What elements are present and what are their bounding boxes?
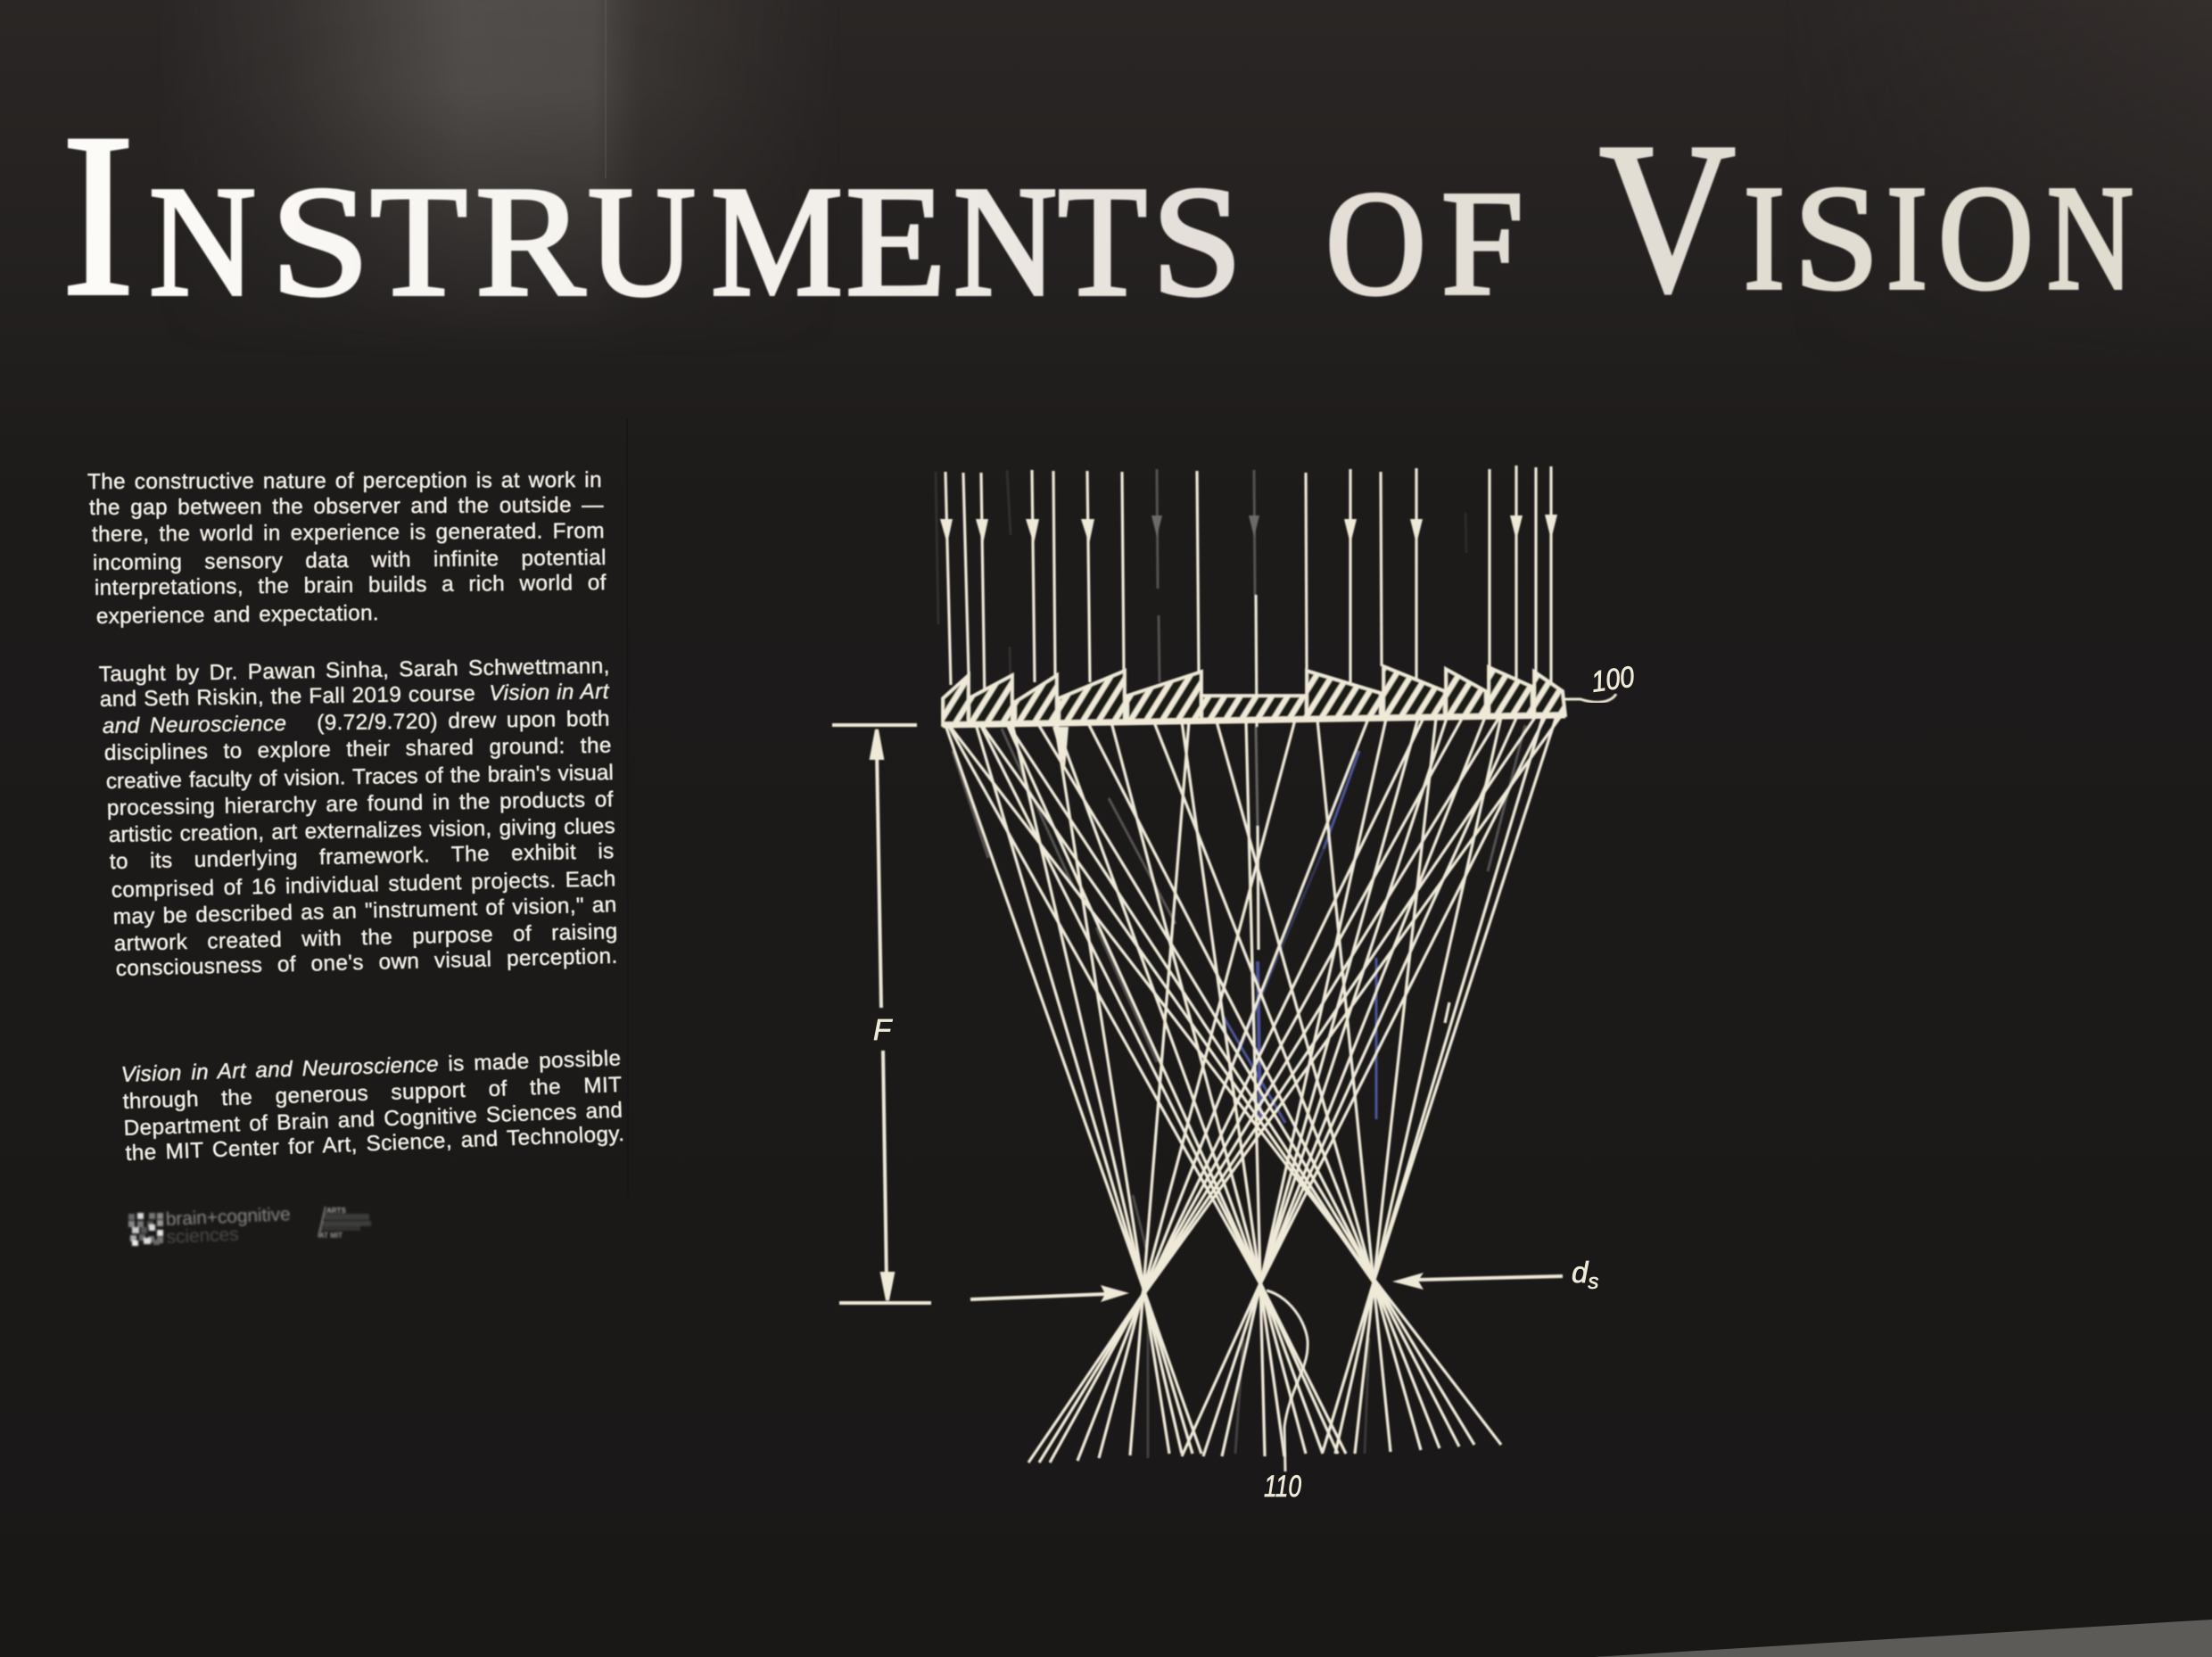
text panel: artwork created with the purpose of raising [113, 919, 618, 955]
logo wordmark [165, 1204, 292, 1248]
text panel: through the generous support of the MIT [122, 1072, 623, 1113]
refracted rays: focus centre [948, 716, 1546, 1456]
title: N [2047, 155, 2134, 321]
text panel: comprised of 16 individual student projects. Each [111, 867, 616, 902]
leader line: 110 [1267, 1290, 1308, 1472]
text panel: experience and expectation. [96, 601, 379, 628]
title: S [1794, 155, 1879, 321]
lens baseline [943, 715, 1565, 725]
text panel: and Neuroscience (9.72/9.720) drew upon both [103, 706, 610, 738]
title [62, 86, 2134, 344]
paragraph: acknowledgement [120, 1046, 625, 1165]
title: E [846, 154, 946, 329]
text panel: incoming sensory data with infinite potential [93, 545, 607, 574]
arrowheads [940, 515, 1557, 544]
arrow: right pointer to focus [1392, 1273, 1563, 1290]
text panel: disciplines to explore their shared ground: the [104, 733, 612, 764]
label: 100: 100 [1589, 660, 1637, 698]
logo: arts at MIT: ARTS [326, 1207, 346, 1215]
logo: arts at MIT: AT MIT [319, 1232, 343, 1240]
text panel: interpretations, the brain builds a rich world of [95, 570, 607, 599]
icon: dot grid [128, 1213, 163, 1246]
text panel: Vision in Art and Neuroscience is made possible [120, 1046, 622, 1086]
prism facets [943, 666, 1565, 725]
refracted rays: focus left [945, 716, 1561, 1463]
text panel: the gap between the observer and the outside — [89, 492, 604, 519]
text panel: artistic creation, art externalizes vision, giving clues [109, 814, 615, 846]
title: V [1599, 99, 1736, 337]
title: U [588, 154, 696, 329]
title: T [370, 154, 467, 329]
title: T [1058, 154, 1147, 329]
dimension: focal length F [832, 725, 931, 1303]
text panel: Taught by Dr. Pawan Sinha, Sarah Schwettmann, [99, 654, 610, 686]
title: I [1886, 155, 1927, 321]
label: 110: 110 [1264, 1470, 1301, 1504]
leader line: 100 [1563, 694, 1616, 702]
logo wordmark: sciences [166, 1224, 239, 1248]
text panel: consciousness of one's own visual perception. [115, 944, 618, 980]
text panel: may be described as an "instrument of vision," an [112, 893, 617, 928]
text panel: and Seth Riskin, the Fall 2019 course Vision in Art [100, 680, 609, 711]
label: ds: s [1588, 1270, 1598, 1294]
title: O [1938, 155, 2034, 321]
text panel: processing hierarchy are found in the products of [107, 787, 614, 820]
title: S [270, 154, 370, 329]
background wall [0, 0, 2212, 348]
faint arrowheads [1151, 515, 1259, 537]
label: F: F [873, 1013, 893, 1046]
logo: arts at MIT [318, 1207, 371, 1240]
title: S [1151, 154, 1242, 329]
title: R [475, 154, 585, 329]
logo wordmark: brain+cognitive [165, 1204, 291, 1230]
text panel: creative faculty of vision. Traces of the brain's visual [106, 761, 614, 793]
floor strip [1594, 1620, 2212, 1657]
blue traces [1222, 751, 1376, 1123]
refracted rays: focus right [949, 716, 1556, 1454]
text panel: to its underlying framework. The exhibit is [110, 839, 615, 873]
title: O [1325, 161, 1426, 326]
title: I [62, 86, 135, 344]
paragraph: intro [87, 467, 607, 629]
incoming rays [945, 466, 1551, 1023]
logo: brain and cognitive sciences [128, 1204, 292, 1248]
text panel: the MIT Center for Art, Science, and Technology. [125, 1122, 625, 1165]
ray wedge under lens [1052, 727, 1069, 769]
label: ds: d [1572, 1256, 1588, 1289]
text panel: Department of Brain and Cognitive Sciences and [123, 1098, 623, 1140]
title: N [953, 154, 1057, 329]
paragraph: course description [98, 654, 618, 980]
title: F [1441, 161, 1523, 326]
diagram: optical lens array [936, 466, 1565, 1463]
text panel: there, the world in experience is generated. From [92, 518, 605, 546]
title: N [149, 154, 256, 329]
arrow: left pointer to focus [970, 1285, 1129, 1302]
title: M [711, 154, 843, 329]
title: I [1744, 155, 1785, 321]
faint rays [936, 469, 1525, 1458]
text panel: The constructive nature of perception is at work in [87, 467, 602, 494]
